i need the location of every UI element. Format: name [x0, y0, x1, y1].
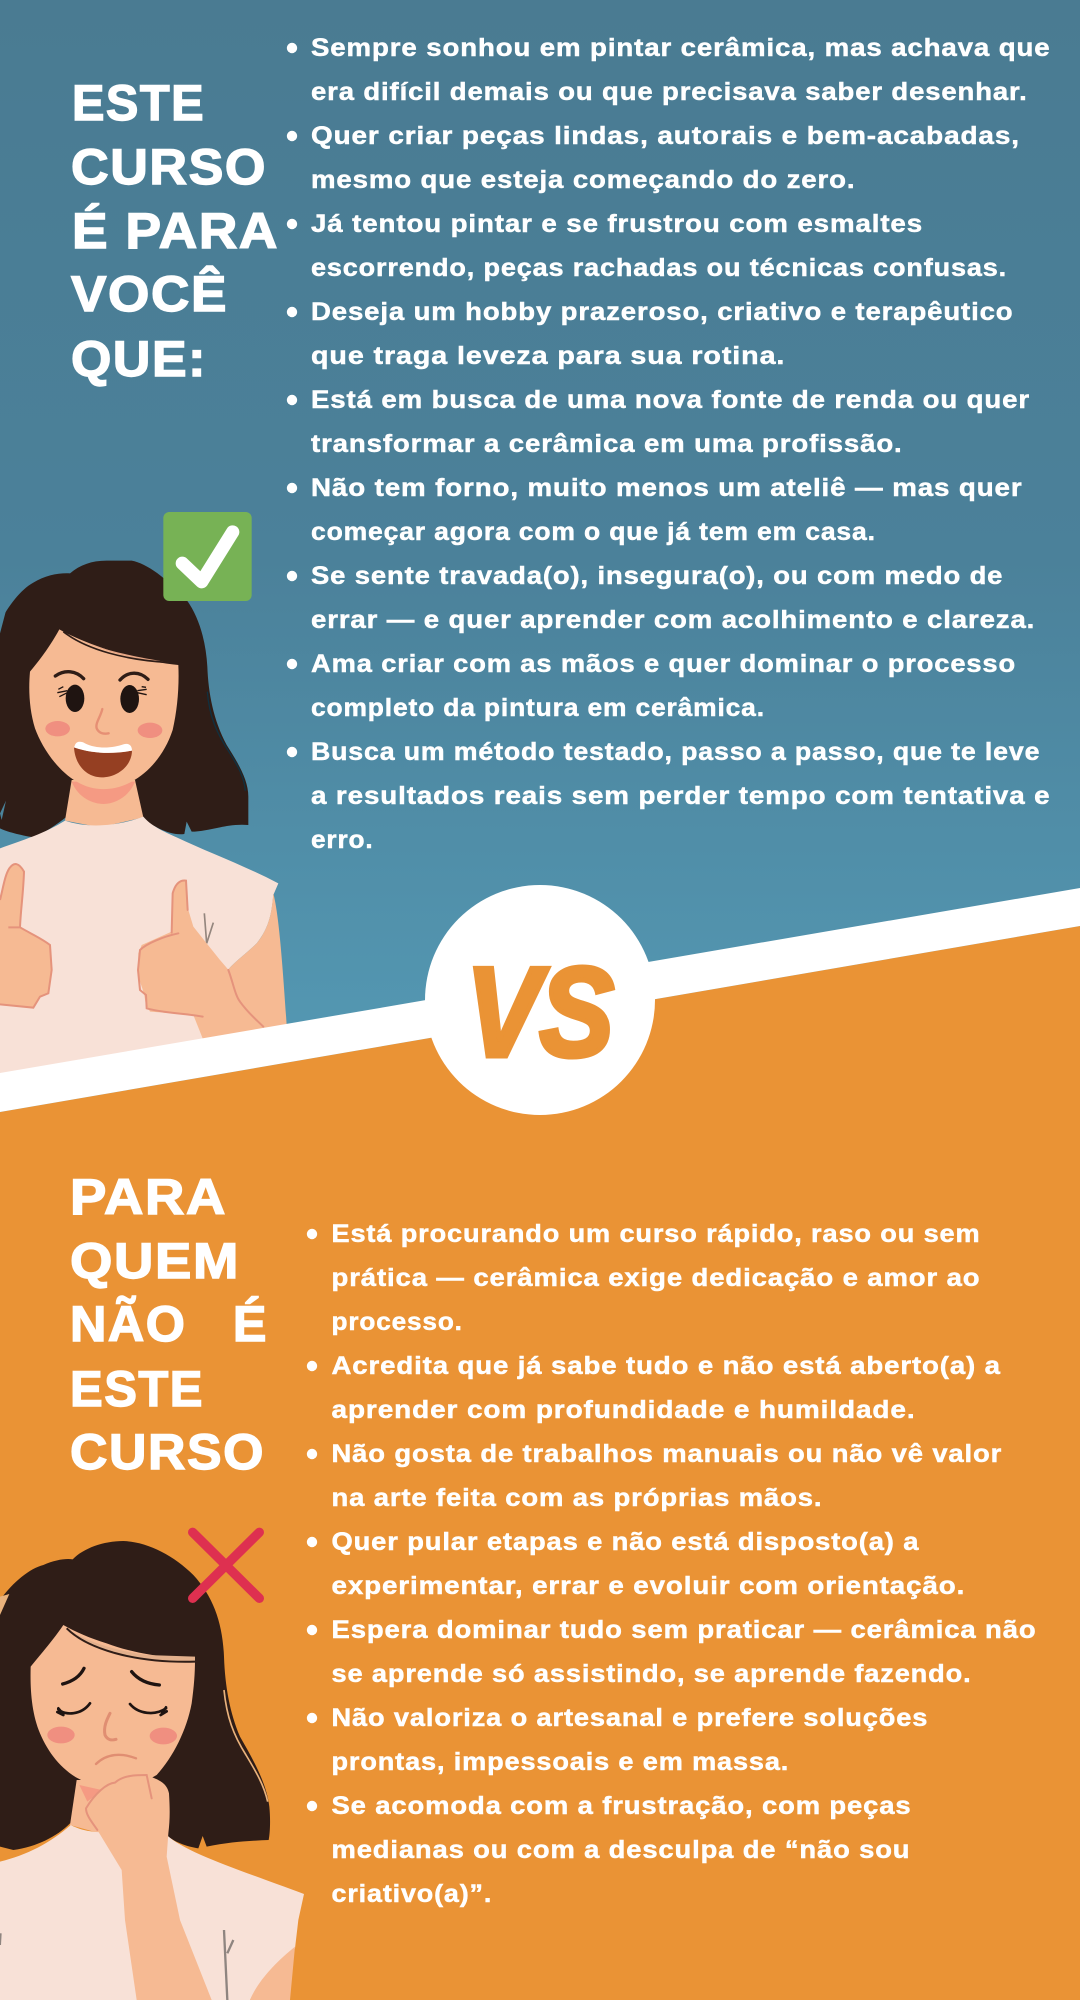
right cheek — [150, 1728, 177, 1744]
item 6 — [307, 1704, 928, 1776]
left hair slit — [0, 1594, 9, 1615]
right hand outline — [138, 881, 263, 1027]
hair highlight — [207, 692, 245, 791]
diagonal white band — [0, 888, 1080, 1112]
list: para quem é o curso — [287, 34, 1050, 854]
left hair slit — [0, 611, 6, 820]
item 5: Espera dominar tudo sem praticar — cerâmica não — [332, 1616, 1036, 1644]
item 9 — [287, 738, 1050, 854]
fringe band — [67, 1628, 195, 1663]
illustration: happy woman with thumbs up — [0, 512, 287, 1083]
neck — [70, 1780, 140, 1833]
heading: este curso é para você que: ESTE — [72, 75, 205, 131]
neck shadow — [79, 1785, 102, 1802]
item 7 — [307, 1792, 912, 1908]
item 7: errar — e quer aprender com acolhimento e clareza. — [311, 606, 1035, 634]
hair highlight — [224, 1690, 268, 1802]
heading: para quem não é este curso: ESTE — [70, 1361, 204, 1417]
heading: para quem não é este curso — [70, 1169, 268, 1480]
right eye — [120, 685, 139, 713]
item 8: Ama criar com as mãos e quer dominar o processo — [311, 650, 1016, 678]
left lashes — [57, 687, 67, 697]
item 3 — [307, 1440, 1002, 1512]
right cheek — [138, 723, 162, 738]
shirt — [0, 817, 278, 1083]
badge: VS — [425, 885, 655, 1115]
face — [31, 1625, 195, 1787]
left cheek — [47, 1727, 75, 1743]
heading: para quem não é este curso: PARA — [70, 1169, 227, 1225]
item 4: experimentar, errar e evoluir com orientação. — [332, 1572, 965, 1600]
forearm and fist — [85, 1775, 212, 2000]
shirt fold — [224, 1930, 233, 2000]
item 3: Já tentou pintar e se frustrou com esmaltes — [311, 210, 923, 238]
neck — [65, 780, 143, 827]
item 6: Não tem forno, muito menos um ateliê — mas quer — [311, 474, 1022, 502]
item 1: Sempre sonhou em pintar cerâmica, mas achava que — [311, 34, 1050, 62]
item 7: criativo(a)”. — [332, 1880, 492, 1908]
item 8 — [287, 650, 1016, 722]
heading: para quem não é este curso: NÃO É — [70, 1296, 268, 1352]
item 8: completo da pintura em cerâmica. — [311, 694, 765, 722]
left cheek — [45, 721, 70, 736]
heading: este curso é para você que: CURSO — [71, 139, 267, 195]
item 6 — [287, 474, 1022, 546]
left eyebrow — [63, 1668, 84, 1684]
item 1: era difícil demais ou que precisava saber desenhar. — [311, 78, 1028, 106]
item 7 — [287, 562, 1035, 634]
right eyebrow — [132, 1672, 159, 1685]
item 2: aprender com profundidade e humildade. — [332, 1396, 916, 1424]
hair — [0, 1541, 270, 1850]
illustration: sad woman with hand on chin — [0, 1532, 304, 2000]
item 1: Está procurando um curso rápido, raso ou sem — [332, 1220, 980, 1248]
item 1: prática — cerâmica exige dedicação e amor ao — [332, 1264, 980, 1292]
fist outline — [86, 1775, 152, 1830]
item 1 — [287, 34, 1050, 106]
right closed eye — [130, 1704, 167, 1715]
item 4: Deseja um hobby prazeroso, criativo e terapêutico — [311, 298, 1014, 326]
heading: este curso é para você que — [71, 75, 279, 387]
left eye — [66, 685, 84, 712]
item 1 — [307, 1220, 980, 1336]
right eyebrow — [120, 673, 148, 680]
item 2: Quer criar peças lindas, autorais e bem-acabadas, — [311, 122, 1020, 150]
item 2: mesmo que esteja começando do zero. — [311, 166, 855, 194]
mouth — [96, 1755, 136, 1764]
left hand outline — [0, 864, 52, 1008]
item 3: Não gosta de trabalhos manuais ou não vê valor — [332, 1440, 1002, 1468]
left eyebrow — [55, 672, 84, 679]
shirt fold — [204, 913, 213, 943]
mouth — [74, 747, 132, 777]
item 3: escorrendo, peças rachadas ou técnicas confusas. — [311, 254, 1007, 282]
item 4: Quer pular etapas e não está disposto(a) a — [332, 1528, 920, 1556]
left closed eye — [57, 1703, 90, 1715]
item 2: Acredita que já sabe tudo e não está aberto(a) a — [332, 1352, 1001, 1380]
nose — [96, 709, 109, 734]
right lashes — [137, 687, 147, 695]
item 2 — [287, 122, 1020, 194]
left hand — [0, 865, 52, 1008]
item 1: processo. — [332, 1308, 463, 1336]
item 9: erro. — [311, 826, 374, 854]
fringe line — [63, 632, 167, 662]
badge: VS: VS — [466, 941, 613, 1083]
heading: para quem não é este curso: CURSO — [70, 1424, 265, 1480]
nose — [105, 1713, 116, 1740]
panel: top blue background — [0, 0, 1080, 1120]
fringe wedge — [65, 633, 167, 662]
item 4: que traga leveza para sua rotina. — [311, 342, 785, 370]
item 6: Não valoriza o artesanal e prefere soluções — [332, 1704, 928, 1732]
item 2 — [307, 1352, 1001, 1424]
heading: este curso é para você que: VOCÊ — [71, 266, 228, 322]
icon: green check badge — [163, 512, 252, 601]
teeth — [74, 742, 132, 753]
item 7: medianas ou com a desculpa de “não sou — [332, 1836, 910, 1864]
heading: este curso é para você que: QUE: — [71, 331, 207, 387]
item 5 — [307, 1616, 1036, 1688]
item 6: começar agora com o que já tem em casa. — [311, 518, 876, 546]
neck shadow — [72, 782, 135, 804]
heading: para quem não é este curso: QUEM — [70, 1233, 240, 1289]
item 9: a resultados reais sem perder tempo com tentativa e — [311, 782, 1050, 810]
item 6: prontas, impessoais e em massa. — [332, 1748, 789, 1776]
item 7: Se sente travada(o), insegura(o), ou com medo de — [311, 562, 1003, 590]
item 4 — [307, 1528, 965, 1600]
item 3: na arte feita com as próprias mãos. — [332, 1484, 822, 1512]
arm right — [250, 1947, 295, 2000]
right hand — [138, 881, 263, 1040]
fringe line — [67, 1628, 195, 1662]
heading: este curso é para você que: É PARA — [72, 203, 279, 259]
item 3 — [287, 210, 1007, 282]
face — [29, 629, 179, 789]
item 5: se aprende só assistindo, se aprende fazendo. — [332, 1660, 972, 1688]
icon: red cross — [193, 1532, 259, 1598]
item 5: transformar a cerâmica em uma profissão. — [311, 430, 903, 458]
list: para quem não é o curso — [307, 1220, 1036, 1908]
item 5 — [287, 386, 1030, 458]
arm — [193, 893, 287, 1040]
shirt — [0, 1825, 304, 2000]
item 5: Está em busca de uma nova fonte de renda ou quer — [311, 386, 1030, 414]
left shirt fold — [0, 1933, 4, 1945]
hair — [0, 561, 248, 837]
item 4 — [287, 298, 1014, 370]
panel: bottom orange background — [0, 926, 1080, 2000]
item 9: Busca um método testado, passo a passo, que te leve — [311, 738, 1040, 766]
item 7: Se acomoda com a frustração, com peças — [332, 1792, 912, 1820]
